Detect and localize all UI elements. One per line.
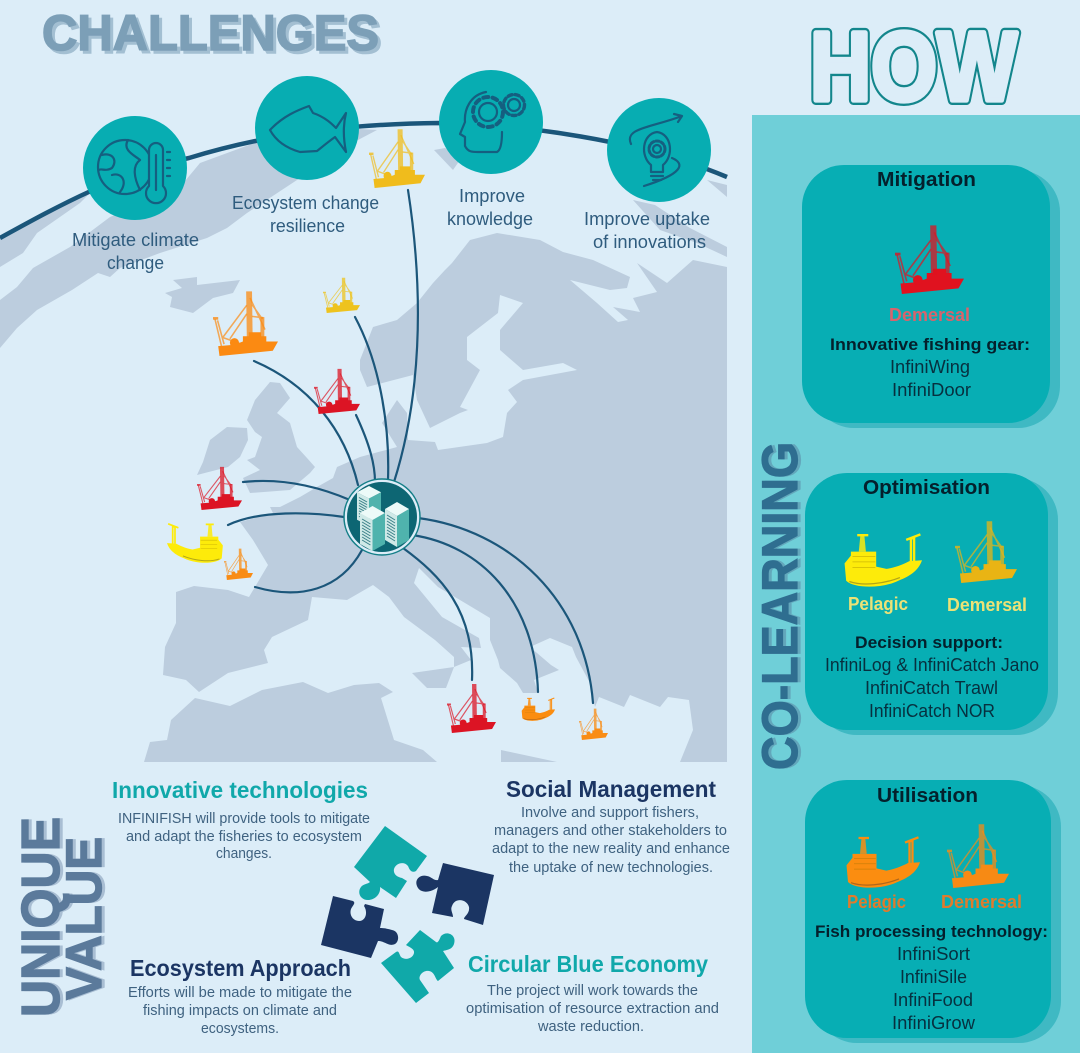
title: challenges: CHALLENGES xyxy=(45,8,382,64)
block: ecosystem approach: Ecosystem Approach xyxy=(130,955,351,981)
block: ecosystem approach: Efforts will be made to mitigate the xyxy=(128,985,352,1001)
card: optimisation: Demersal xyxy=(947,595,1027,615)
challenge: mitigate climate change: Mitigate climate xyxy=(72,230,199,250)
card: utilisation: InfiniFood xyxy=(893,990,973,1010)
card: optimisation: InfiniCatch NOR xyxy=(869,701,995,721)
challenge: ecosystem change resilience xyxy=(232,76,379,236)
card: utilisation: Fish processing technology: xyxy=(815,922,1048,941)
block: innovative technologies: changes. xyxy=(216,846,272,862)
card: optimisation: InfiniLog & InfiniCatch Jano xyxy=(825,655,1039,675)
card: utilisation: Demersal xyxy=(941,892,1022,912)
challenge: improve knowledge: knowledge xyxy=(447,209,533,229)
card: mitigation: InfiniWing xyxy=(890,357,970,377)
card: optimisation: InfiniCatch Trawl xyxy=(865,678,998,698)
challenge: improve uptake of innovations xyxy=(584,98,711,252)
card: utilisation: Utilisation xyxy=(877,785,978,807)
heading: unique value xyxy=(11,817,115,1017)
icon: globe and thermometer xyxy=(98,140,170,203)
heading: unique value: VALUE xyxy=(59,837,115,1000)
challenge: improve uptake of innovations: of innovations xyxy=(593,232,706,252)
challenge: ecosystem change resilience: Ecosystem change xyxy=(232,193,379,213)
challenge: improve knowledge xyxy=(439,70,543,229)
card: mitigation: Demersal xyxy=(889,305,970,325)
card: utilisation: InfiniGrow xyxy=(892,1013,976,1033)
block: circular blue economy: waste reduction. xyxy=(537,1019,644,1035)
title: how: HOW xyxy=(810,12,1017,121)
card: optimisation: Pelagic xyxy=(848,594,908,614)
heading: unique value: UNIQUE xyxy=(14,817,74,1017)
icon: puzzle pieces xyxy=(321,826,494,1003)
block: innovative technologies: Innovative technologies xyxy=(112,777,368,803)
horizon arc xyxy=(0,123,727,238)
central hub: buildings xyxy=(344,479,420,555)
vessel: red demersal xyxy=(895,225,964,294)
challenge: mitigate climate change xyxy=(72,116,199,273)
block: social management: adapt to the new reality and enhance xyxy=(492,841,730,857)
block: innovative technologies xyxy=(112,777,370,862)
block: innovative technologies: INFINIFISH will provide tools to mitigate xyxy=(118,811,370,827)
icon: light bulb with gear xyxy=(630,114,682,186)
challenge: improve uptake of innovations: Improve uptake xyxy=(584,209,710,229)
card: optimisation: Optimisation xyxy=(863,477,990,499)
card: utilisation: InfiniSile xyxy=(900,967,967,987)
card: utilisation xyxy=(805,780,1061,1043)
vessels: orange pelagic and demersal xyxy=(846,824,1009,888)
block: circular blue economy: The project will work towards the xyxy=(487,983,698,999)
block: ecosystem approach: fishing impacts on climate and xyxy=(143,1003,337,1019)
card: mitigation: InfiniDoor xyxy=(892,380,971,400)
heading: co-learning: CO-LEARNING xyxy=(752,442,808,770)
card: mitigation xyxy=(802,165,1060,428)
card: optimisation: Decision support: xyxy=(855,633,1003,652)
vessels on the map xyxy=(167,129,608,740)
block: social management: Social Management xyxy=(506,776,716,802)
icon: head with gears xyxy=(460,92,524,152)
challenge: mitigate climate change: change xyxy=(107,253,164,273)
card: mitigation: Mitigation xyxy=(877,169,976,191)
block: social management: the uptake of new technologies. xyxy=(509,860,713,876)
block: circular blue economy: Circular Blue Economy xyxy=(468,951,708,977)
title: how: HOW xyxy=(810,12,1017,121)
block: circular blue economy xyxy=(466,951,719,1035)
block: circular blue economy: optimisation of resource extraction and xyxy=(466,1001,719,1017)
block: social management: Involve and support fishers, xyxy=(521,805,699,821)
card: utilisation: InfiniSort xyxy=(897,944,970,964)
block: ecosystem approach: ecosystems. xyxy=(201,1021,279,1037)
vessels: yellow pelagic and demersal xyxy=(845,521,1017,587)
icon: fish xyxy=(270,106,346,152)
connection lines xyxy=(228,190,593,703)
title: challenges: CHALLENGES xyxy=(42,5,379,61)
block: innovative technologies: and adapt the fisheries to ecosystem xyxy=(126,829,362,845)
block: social management xyxy=(492,776,730,876)
challenge: ecosystem change resilience: resilience xyxy=(270,216,345,236)
challenge: improve knowledge: Improve xyxy=(459,186,525,206)
block: social management: managers and other stakeholders to xyxy=(494,823,727,839)
block: ecosystem approach xyxy=(128,955,352,1037)
heading: co-learning: CO-LEARNING xyxy=(755,442,811,770)
heading: unique value: UNIQUE xyxy=(11,817,71,1017)
map of Europe xyxy=(0,128,727,762)
card: optimisation xyxy=(805,473,1058,735)
heading: unique value: VALUE xyxy=(56,837,112,1000)
panel: how xyxy=(752,115,1080,1053)
card: mitigation: Innovative fishing gear: xyxy=(830,335,1030,354)
card: utilisation: Pelagic xyxy=(847,892,906,912)
